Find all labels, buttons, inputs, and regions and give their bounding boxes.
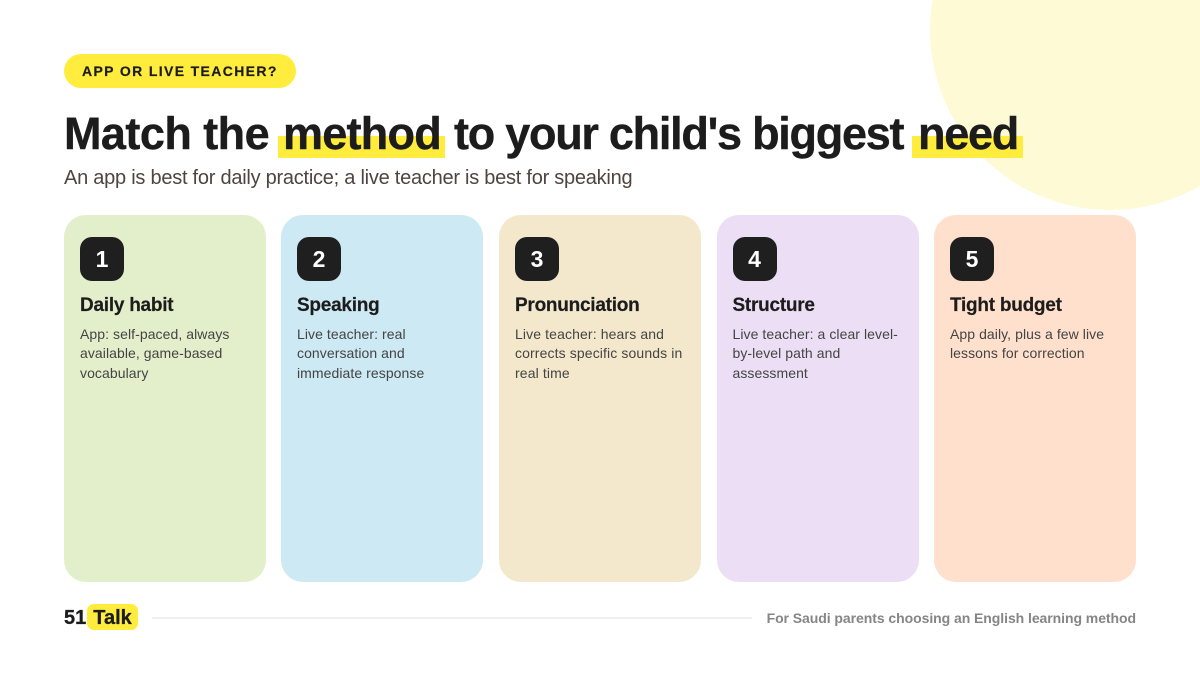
card heading: Tight budget bbox=[950, 295, 1062, 316]
title: to your child's biggest bbox=[454, 108, 903, 159]
card heading: Speaking bbox=[297, 295, 379, 316]
logo highlight: Talk bbox=[93, 607, 132, 629]
badge 2 bbox=[297, 237, 341, 281]
subtitle: An app is best for daily practice; a live teacher is best for speaking bbox=[64, 167, 632, 189]
badge 4 bbox=[732, 237, 776, 281]
panel: daily habit bbox=[64, 215, 266, 582]
card text bbox=[80, 326, 229, 381]
decorative circle bbox=[930, 0, 1200, 210]
card text bbox=[732, 326, 898, 381]
card heading: Pronunciation bbox=[515, 295, 639, 316]
card text: App daily, plus a few live bbox=[950, 326, 1104, 342]
panel: pronunciation bbox=[499, 215, 701, 582]
highlight: need bbox=[912, 136, 1023, 158]
panel: tight budget bbox=[934, 215, 1136, 582]
card text bbox=[297, 326, 424, 381]
card heading: Structure bbox=[732, 295, 815, 316]
card text bbox=[950, 326, 1104, 361]
card text: lessons for correction bbox=[950, 345, 1085, 361]
badge 3 bbox=[515, 237, 559, 281]
card text: real time bbox=[515, 365, 570, 381]
tag pill bbox=[64, 54, 296, 88]
card text: by-level path and bbox=[732, 345, 840, 361]
tag pill: APP OR LIVE TEACHER? bbox=[82, 63, 278, 79]
logo bbox=[64, 604, 138, 630]
title: need bbox=[918, 108, 1018, 159]
card text: vocabulary bbox=[80, 365, 148, 381]
highlight: method bbox=[278, 136, 445, 158]
panel: structure bbox=[716, 215, 918, 582]
card text: immediate response bbox=[297, 365, 424, 381]
footer note: For Saudi parents choosing an English learning method bbox=[767, 610, 1136, 626]
card text bbox=[515, 326, 682, 381]
logo: 51 bbox=[64, 607, 86, 629]
card text: Live teacher: real bbox=[297, 326, 406, 342]
badge 1 bbox=[80, 237, 124, 281]
badge 2: 2 bbox=[313, 246, 325, 272]
card text: Live teacher: a clear level- bbox=[732, 326, 898, 342]
panel: speaking bbox=[281, 215, 483, 582]
badge 4: 4 bbox=[748, 246, 761, 272]
card heading: Daily habit bbox=[80, 295, 173, 316]
card text: available, game-based bbox=[80, 345, 222, 361]
badge 5: 5 bbox=[966, 246, 978, 272]
card text: App: self-paced, always bbox=[80, 326, 229, 342]
logo highlight bbox=[87, 604, 138, 630]
badge 5 bbox=[950, 237, 994, 281]
title bbox=[64, 108, 1018, 159]
card text: Live teacher: hears and bbox=[515, 326, 664, 342]
card text: conversation and bbox=[297, 345, 405, 361]
card text: corrects specific sounds in bbox=[515, 345, 682, 361]
title: method bbox=[283, 108, 441, 159]
badge 3: 3 bbox=[531, 246, 543, 272]
title: Match the bbox=[64, 108, 269, 159]
card text: assessment bbox=[732, 365, 808, 381]
badge 1: 1 bbox=[96, 246, 108, 272]
